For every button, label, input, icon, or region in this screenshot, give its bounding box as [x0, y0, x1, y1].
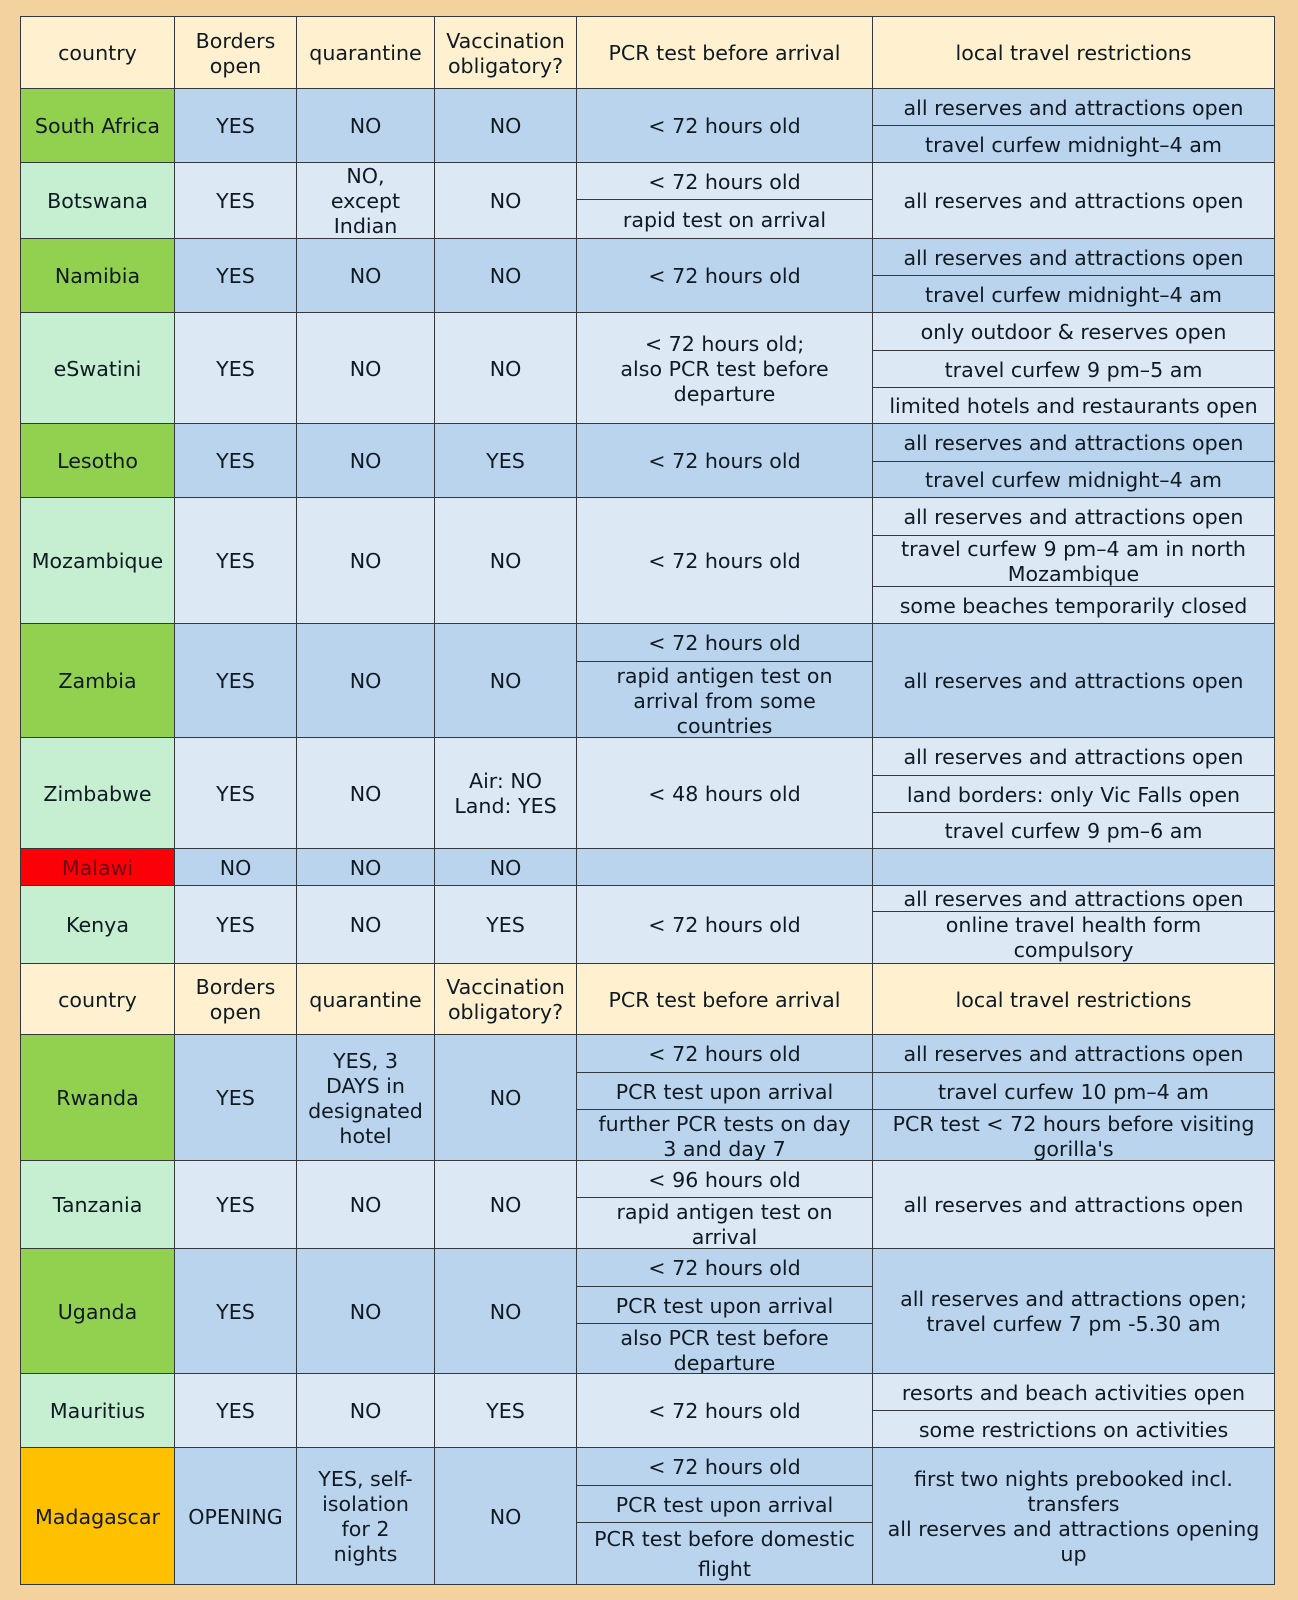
Zambia restrictions [873, 624, 1274, 737]
Rwanda quarantine [297, 1035, 434, 1160]
Mauritius restrictions [873, 1374, 1274, 1447]
Tanzania PCR: rapid antigen test on [616, 1200, 833, 1224]
Uganda borders [175, 1249, 296, 1373]
country: eSwatini: eSwatini [54, 356, 141, 380]
Rwanda PCR: < 72 hours old [648, 1042, 801, 1066]
row: Zambia [20, 623, 1275, 738]
Madagascar restrictions: transfers [1027, 1492, 1120, 1516]
Madagascar vaccination [435, 1448, 576, 1584]
row: Madagascar [20, 1447, 1275, 1585]
Uganda restrictions [873, 1249, 1274, 1373]
eSwatini borders [175, 313, 296, 423]
Madagascar borders: OPENING [188, 1504, 283, 1528]
Mozambique restrictions: Mozambique [1008, 562, 1139, 586]
row: Kenya [20, 885, 1275, 964]
Zimbabwe vaccination: Land: YES [454, 794, 557, 818]
country: Mauritius [21, 1374, 174, 1447]
header: vaccination: Vaccination [446, 28, 565, 52]
Tanzania restrictions: all reserves and attractions open [904, 1193, 1243, 1217]
row: eSwatini [20, 312, 1275, 424]
Botswana quarantine: NO, [346, 164, 385, 188]
Kenya quarantine: NO [350, 913, 381, 937]
Tanzania vaccination [435, 1161, 576, 1248]
Rwanda restrictions: PCR test < 72 hours before visiting [893, 1112, 1254, 1136]
Zimbabwe restrictions: land borders: only Vic Falls open [907, 782, 1240, 806]
row: South Africa [20, 88, 1275, 163]
eSwatini PCR: also PCR test before [620, 356, 829, 380]
Namibia quarantine [297, 239, 434, 312]
Mozambique PCR [577, 498, 872, 623]
Rwanda vaccination: NO [490, 1086, 521, 1110]
Rwanda borders [175, 1035, 296, 1160]
Kenya vaccination [435, 886, 576, 963]
Botswana borders: YES [216, 189, 255, 213]
Uganda PCR: < 72 hours old [648, 1256, 801, 1280]
eSwatini vaccination: NO [490, 356, 521, 380]
Madagascar quarantine [297, 1448, 434, 1584]
Namibia restrictions: travel curfew midnight–4 am [925, 282, 1222, 306]
country: Lesotho: Lesotho [57, 449, 138, 473]
Rwanda PCR: PCR test upon arrival [616, 1080, 833, 1104]
Botswana PCR [577, 163, 872, 238]
header 2: local restrictions: local travel restrictions [956, 988, 1192, 1012]
header 2: quarantine: quarantine [309, 988, 422, 1012]
Tanzania quarantine: NO [350, 1193, 381, 1217]
country: Botswana: Botswana [47, 189, 148, 213]
header: PCR test: PCR test before arrival [608, 41, 840, 65]
country: Madagascar [21, 1448, 174, 1584]
table header 2 [20, 963, 1275, 1035]
header: quarantine [297, 17, 434, 88]
eSwatini restrictions: only outdoor & reserves open [921, 320, 1226, 344]
Madagascar quarantine: YES, self- [318, 1467, 413, 1491]
Zambia quarantine: NO [350, 669, 381, 693]
Mozambique restrictions: all reserves and attractions open [904, 505, 1243, 529]
eSwatini PCR: departure [674, 382, 775, 406]
header 2: borders open: Borders [196, 975, 275, 999]
row: Rwanda [20, 1034, 1275, 1161]
country: Zimbabwe [21, 738, 174, 848]
header 2: country: country [58, 988, 137, 1012]
Lesotho PCR [577, 424, 872, 497]
country: Madagascar: Madagascar [35, 1504, 160, 1528]
Kenya quarantine [297, 886, 434, 963]
eSwatini PCR: < 72 hours old; [645, 332, 804, 356]
country: Lesotho [21, 424, 174, 497]
header: vaccination: obligatory? [448, 54, 563, 78]
Uganda PCR: also PCR test before [620, 1326, 829, 1350]
row: Zimbabwe [20, 737, 1275, 849]
Namibia quarantine: NO [350, 264, 381, 288]
country: Zambia: Zambia [58, 669, 137, 693]
Madagascar PCR [577, 1448, 872, 1584]
Zambia PCR: rapid antigen test on [616, 664, 833, 688]
Malawi vaccination: NO [490, 856, 521, 880]
Zimbabwe quarantine: NO [350, 782, 381, 806]
Malawi borders [175, 849, 296, 885]
Mauritius quarantine: NO [350, 1399, 381, 1423]
header 2: borders open [175, 964, 296, 1034]
Madagascar PCR: flight [698, 1556, 751, 1580]
country: Mozambique: Mozambique [32, 549, 163, 573]
header 2: local restrictions [873, 964, 1274, 1034]
Madagascar restrictions: first two nights prebooked incl. [914, 1467, 1233, 1491]
South Africa quarantine [297, 89, 434, 162]
header: borders open [175, 17, 296, 88]
Botswana quarantine [297, 163, 434, 238]
header 2: borders open: open [210, 1000, 261, 1024]
Zimbabwe restrictions: travel curfew 9 pm–6 am [945, 819, 1202, 843]
Mauritius borders [175, 1374, 296, 1447]
Rwanda restrictions: travel curfew 10 pm–4 am [938, 1080, 1209, 1104]
country: Zambia [21, 624, 174, 737]
country: Kenya: Kenya [66, 913, 129, 937]
row: Malawi [20, 848, 1275, 886]
Mozambique vaccination [435, 498, 576, 623]
Zambia restrictions: all reserves and attractions open [904, 669, 1243, 693]
Malawi quarantine: NO [350, 856, 381, 880]
Madagascar vaccination: NO [490, 1504, 521, 1528]
Mozambique borders: YES [216, 549, 255, 573]
Rwanda vaccination [435, 1035, 576, 1160]
country: Kenya [21, 886, 174, 963]
Zimbabwe PCR [577, 738, 872, 848]
Uganda quarantine: NO [350, 1300, 381, 1324]
header: borders open: open [210, 54, 261, 78]
Botswana vaccination [435, 163, 576, 238]
Malawi PCR (empty) [577, 849, 872, 885]
country: Botswana [21, 163, 174, 238]
Zambia PCR: < 72 hours old [648, 631, 801, 655]
Namibia restrictions [873, 239, 1274, 312]
Botswana borders [175, 163, 296, 238]
Tanzania PCR [577, 1161, 872, 1248]
Uganda PCR: PCR test upon arrival [616, 1294, 833, 1318]
Malawi borders: NO [220, 856, 251, 880]
Zimbabwe quarantine [297, 738, 434, 848]
Lesotho PCR: < 72 hours old [648, 449, 801, 473]
Rwanda restrictions: all reserves and attractions open [904, 1042, 1243, 1066]
Uganda restrictions: travel curfew 7 pm -5.30 am [926, 1312, 1221, 1336]
Zimbabwe borders: YES [216, 782, 255, 806]
Rwanda restrictions [873, 1035, 1274, 1160]
Mozambique restrictions: travel curfew 9 pm–4 am in north [901, 536, 1246, 560]
header 2: vaccination: obligatory? [448, 1000, 563, 1024]
Rwanda quarantine: YES, 3 [333, 1048, 398, 1072]
Mauritius vaccination: YES [486, 1399, 525, 1423]
Lesotho restrictions: all reserves and attractions open [904, 431, 1243, 455]
Tanzania PCR: < 96 hours old [648, 1168, 801, 1192]
Mozambique restrictions [873, 498, 1274, 623]
country: Rwanda: Rwanda [56, 1086, 139, 1110]
Madagascar restrictions [873, 1448, 1274, 1584]
Kenya PCR [577, 886, 872, 963]
Botswana quarantine: except [331, 189, 400, 213]
Kenya restrictions: all reserves and attractions open [904, 887, 1243, 911]
Tanzania restrictions [873, 1161, 1274, 1248]
header 2: PCR test: PCR test before arrival [608, 988, 840, 1012]
eSwatini vaccination [435, 313, 576, 423]
Tanzania borders: YES [216, 1193, 255, 1217]
Lesotho restrictions: travel curfew midnight–4 am [925, 468, 1222, 492]
Rwanda restrictions: gorilla's [1033, 1137, 1114, 1161]
table header 1 [20, 16, 1275, 89]
eSwatini restrictions: limited hotels and restaurants open [889, 394, 1258, 418]
eSwatini restrictions: travel curfew 9 pm–5 am [945, 358, 1202, 382]
Zambia borders: YES [216, 669, 255, 693]
South Africa borders: YES [216, 114, 255, 138]
Tanzania quarantine [297, 1161, 434, 1248]
Botswana quarantine: Indian [334, 214, 397, 238]
Zambia vaccination [435, 624, 576, 737]
Madagascar quarantine: nights [334, 1542, 397, 1566]
header: local restrictions [873, 17, 1274, 88]
Zimbabwe borders [175, 738, 296, 848]
header: country: country [58, 41, 137, 65]
Zambia PCR: countries [677, 714, 772, 738]
Mauritius restrictions: some restrictions on activities [919, 1418, 1228, 1442]
South Africa PCR [577, 89, 872, 162]
Zambia quarantine [297, 624, 434, 737]
Tanzania PCR: arrival [692, 1225, 757, 1249]
Mauritius PCR: < 72 hours old [648, 1399, 801, 1423]
country: Mozambique [21, 498, 174, 623]
header 2: vaccination [435, 964, 576, 1034]
country: Namibia: Namibia [55, 264, 140, 288]
country: Uganda: Uganda [58, 1300, 137, 1324]
Zambia vaccination: NO [490, 669, 521, 693]
Tanzania borders [175, 1161, 296, 1248]
Rwanda PCR: 3 and day 7 [663, 1137, 786, 1161]
Malawi vaccination [435, 849, 576, 885]
Lesotho borders [175, 424, 296, 497]
Lesotho quarantine: NO [350, 449, 381, 473]
Mozambique quarantine: NO [350, 549, 381, 573]
Namibia borders [175, 239, 296, 312]
Mozambique PCR: < 72 hours old [648, 549, 801, 573]
Uganda PCR [577, 1249, 872, 1373]
row: Lesotho [20, 423, 1275, 498]
country: Malawi: Malawi [62, 856, 133, 880]
South Africa quarantine: NO [350, 114, 381, 138]
country: Namibia [21, 239, 174, 312]
country: Zimbabwe: Zimbabwe [43, 782, 152, 806]
Kenya restrictions: compulsory [1014, 938, 1133, 962]
Uganda vaccination [435, 1249, 576, 1373]
South Africa restrictions: travel curfew midnight–4 am [925, 132, 1222, 156]
Namibia restrictions: all reserves and attractions open [904, 246, 1243, 270]
country: Rwanda [21, 1035, 174, 1160]
header: borders open: Borders [196, 28, 275, 52]
Zimbabwe restrictions: all reserves and attractions open [904, 745, 1243, 769]
row: Namibia [20, 238, 1275, 313]
Kenya PCR: < 72 hours old [648, 913, 801, 937]
Madagascar restrictions: all reserves and attractions opening [888, 1517, 1259, 1541]
Namibia PCR: < 72 hours old [648, 264, 801, 288]
Mauritius borders: YES [216, 1399, 255, 1423]
Mauritius restrictions: resorts and beach activities open [902, 1380, 1245, 1404]
Namibia vaccination: NO [490, 264, 521, 288]
header 2: quarantine [297, 964, 434, 1034]
Madagascar borders [175, 1448, 296, 1584]
Kenya vaccination: YES [486, 913, 525, 937]
Zambia borders [175, 624, 296, 737]
Mozambique vaccination: NO [490, 549, 521, 573]
eSwatini quarantine: NO [350, 356, 381, 380]
country: Uganda [21, 1249, 174, 1373]
Madagascar PCR: PCR test upon arrival [616, 1492, 833, 1516]
Zimbabwe vaccination: Air: NO [469, 769, 542, 793]
Zambia PCR: arrival from some [633, 689, 816, 713]
country: South Africa: South Africa [35, 114, 160, 138]
Kenya borders: YES [216, 913, 255, 937]
row: Botswana [20, 162, 1275, 239]
Uganda restrictions: all reserves and attractions open; [900, 1287, 1247, 1311]
Botswana vaccination: NO [490, 189, 521, 213]
country: South Africa [21, 89, 174, 162]
South Africa restrictions: all reserves and attractions open [904, 96, 1243, 120]
South Africa restrictions [873, 89, 1274, 162]
Mozambique borders [175, 498, 296, 623]
country: Mauritius: Mauritius [50, 1399, 145, 1423]
Uganda quarantine [297, 1249, 434, 1373]
header: vaccination [435, 17, 576, 88]
Kenya restrictions [873, 886, 1274, 963]
South Africa vaccination [435, 89, 576, 162]
Madagascar restrictions: up [1060, 1542, 1087, 1566]
Lesotho quarantine [297, 424, 434, 497]
Botswana PCR: rapid test on arrival [623, 208, 826, 232]
South Africa vaccination: NO [490, 114, 521, 138]
Mauritius PCR [577, 1374, 872, 1447]
Malawi quarantine [297, 849, 434, 885]
Tanzania vaccination: NO [490, 1193, 521, 1217]
Zambia PCR [577, 624, 872, 737]
South Africa PCR: < 72 hours old [648, 114, 801, 138]
Namibia borders: YES [216, 264, 255, 288]
Mauritius vaccination [435, 1374, 576, 1447]
Namibia PCR [577, 239, 872, 312]
Zimbabwe vaccination [435, 738, 576, 848]
Lesotho vaccination: YES [486, 449, 525, 473]
country: Tanzania: Tanzania [53, 1193, 142, 1217]
Rwanda PCR: further PCR tests on day [598, 1112, 851, 1136]
header: local restrictions: local travel restrictions [956, 41, 1192, 65]
header: PCR test [577, 17, 872, 88]
Uganda PCR: departure [674, 1351, 775, 1375]
Rwanda PCR [577, 1035, 872, 1160]
Rwanda borders: YES [216, 1086, 255, 1110]
row: Tanzania [20, 1160, 1275, 1249]
eSwatini quarantine [297, 313, 434, 423]
country: eSwatini [21, 313, 174, 423]
Mauritius quarantine [297, 1374, 434, 1447]
Rwanda quarantine: DAYS in [326, 1074, 405, 1098]
header: country [21, 17, 174, 88]
country: Malawi [21, 849, 174, 885]
Lesotho restrictions [873, 424, 1274, 497]
Uganda borders: YES [216, 1300, 255, 1324]
Uganda vaccination: NO [490, 1300, 521, 1324]
eSwatini PCR [577, 313, 872, 423]
country: Tanzania [21, 1161, 174, 1248]
Madagascar PCR: < 72 hours old [648, 1455, 801, 1479]
Kenya restrictions: online travel health form [946, 913, 1201, 937]
row: Mozambique [20, 497, 1275, 624]
header: quarantine: quarantine [309, 41, 422, 65]
Botswana restrictions [873, 163, 1274, 238]
Madagascar PCR: PCR test before domestic [594, 1526, 855, 1550]
Mozambique restrictions: some beaches temporarily closed [900, 594, 1247, 618]
row: Mauritius [20, 1373, 1275, 1448]
Rwanda quarantine: hotel [339, 1124, 392, 1148]
South Africa borders [175, 89, 296, 162]
header 2: vaccination: Vaccination [446, 975, 565, 999]
header 2: country [21, 964, 174, 1034]
header 2: PCR test [577, 964, 872, 1034]
Malawi restrictions (empty) [873, 849, 1274, 885]
Namibia vaccination [435, 239, 576, 312]
Rwanda quarantine: designated [308, 1098, 423, 1122]
Madagascar quarantine: for 2 [342, 1517, 389, 1541]
Botswana PCR: < 72 hours old [648, 170, 801, 194]
Mozambique quarantine [297, 498, 434, 623]
Zimbabwe restrictions [873, 738, 1274, 848]
Lesotho vaccination [435, 424, 576, 497]
Botswana restrictions: all reserves and attractions open [904, 189, 1243, 213]
Zimbabwe PCR: < 48 hours old [648, 782, 801, 806]
eSwatini restrictions [873, 313, 1274, 423]
row: Uganda [20, 1248, 1275, 1374]
Kenya borders [175, 886, 296, 963]
Lesotho borders: YES [216, 449, 255, 473]
Madagascar quarantine: isolation [322, 1492, 409, 1516]
eSwatini borders: YES [216, 356, 255, 380]
